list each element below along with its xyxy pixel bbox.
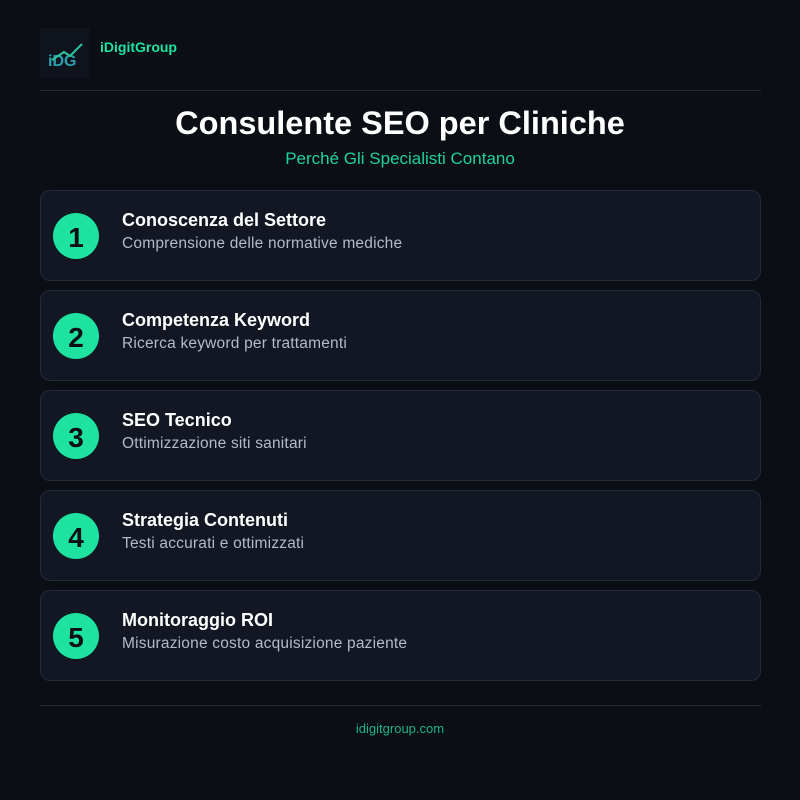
card 5: Monitoraggio ROI [122,610,273,630]
brand name: iDigitGroup [100,39,177,55]
title: Consulente SEO per Cliniche [175,105,625,141]
card 2: 2 [68,322,84,353]
card 5: 5 [68,622,84,653]
card 4: Testi accurati e ottimizzati [122,535,304,552]
card 2 [40,290,761,381]
card 2: Ricerca keyword per trattamenti [122,335,347,352]
card 1: Conoscenza del Settore [122,210,326,230]
logo [40,28,90,78]
card 5 [40,590,761,681]
card 3 [40,390,761,481]
card 1: 1 [68,222,84,253]
card 3: 3 [68,422,84,453]
card 4 [40,490,761,581]
card 1 [40,190,761,281]
card 3: Ottimizzazione siti sanitari [122,435,307,452]
footer: idigitgroup.com [356,721,444,736]
card 1: Comprensione delle normative mediche [122,235,402,252]
card 2: Competenza Keyword [122,310,310,330]
subtitle: Perché Gli Specialisti Contano [285,149,515,168]
card 3: SEO Tecnico [122,410,232,430]
logo: iDG [48,53,76,70]
card 4: 4 [68,522,84,553]
card 4: Strategia Contenuti [122,510,288,530]
card 5: Misurazione costo acquisizione paziente [122,635,407,652]
